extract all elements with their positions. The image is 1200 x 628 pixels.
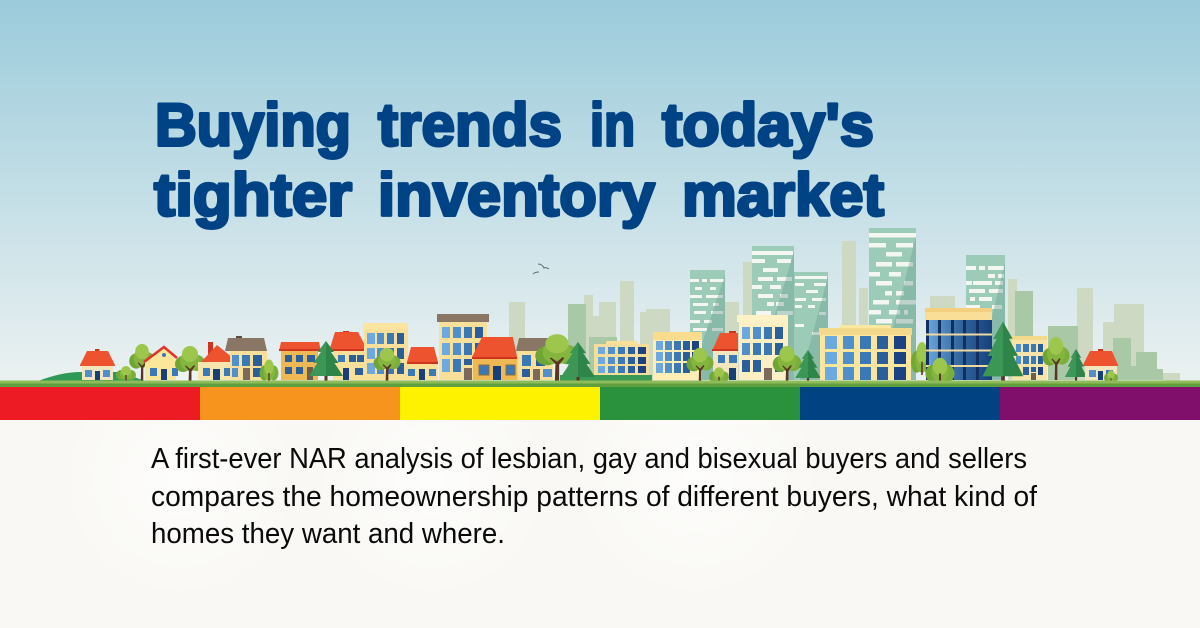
body text	[151, 443, 1038, 550]
birds	[533, 264, 549, 274]
tree behind tower	[911, 342, 933, 375]
sky background	[0, 0, 1200, 381]
house 10	[472, 337, 517, 380]
tree behind house 2	[129, 344, 155, 381]
building 18	[1012, 336, 1047, 380]
lower background panel	[0, 360, 1200, 628]
title line 1: today's	[662, 92, 874, 158]
building 6	[329, 331, 367, 380]
glass tower 1	[690, 270, 725, 380]
big pine tree	[983, 322, 1023, 384]
tree	[686, 348, 714, 383]
tree by house 2	[175, 346, 205, 385]
title line 1: Buying	[155, 92, 351, 158]
ground	[0, 380, 1200, 387]
small bush	[116, 366, 136, 381]
tree	[773, 346, 801, 385]
title line 2: tighter	[154, 162, 352, 228]
green base behind low building	[560, 375, 652, 381]
tree by building 7	[374, 348, 400, 381]
house 1	[80, 349, 115, 380]
title line 1: in	[590, 92, 635, 158]
pine tree	[561, 342, 595, 382]
rainbow band	[0, 387, 1200, 420]
house 2	[144, 347, 178, 380]
bush	[709, 367, 729, 383]
house 8	[407, 347, 438, 380]
glass tower 2	[752, 246, 794, 380]
bush	[1104, 370, 1118, 383]
tree	[1042, 337, 1070, 380]
title	[154, 92, 884, 228]
pine tree	[309, 341, 343, 381]
building 9	[437, 314, 489, 380]
glass tower 3	[794, 272, 828, 380]
building 15	[737, 315, 788, 380]
building 12	[594, 341, 649, 375]
body line 3: homes they want and where.	[151, 518, 505, 550]
glass tower 5	[966, 255, 1005, 380]
building 13	[653, 332, 702, 380]
title line 2: market	[682, 162, 884, 228]
glass tower 4	[869, 228, 916, 380]
body line 1: A first-ever NAR analysis of lesbian, gay and bisexual buyers and sellers	[151, 443, 1027, 475]
house 3	[198, 342, 238, 380]
building 7	[363, 323, 408, 380]
house 19	[1083, 349, 1118, 380]
pine tree	[1065, 349, 1087, 381]
hill	[38, 372, 145, 381]
building 11	[516, 338, 553, 380]
pine tree	[795, 350, 821, 382]
building 17	[925, 308, 992, 380]
title line 2: inventory	[378, 162, 656, 228]
building 4	[225, 336, 267, 380]
house 14	[712, 331, 738, 380]
large tree	[535, 334, 579, 381]
body line 2: compares the homeownership patterns of different buyers, what kind of	[151, 481, 1038, 513]
bush	[926, 358, 954, 384]
building 5	[279, 342, 321, 380]
title line 1: trends	[378, 92, 562, 158]
distant skyline	[509, 241, 1180, 381]
building 16	[819, 325, 912, 380]
small tree	[260, 360, 278, 382]
